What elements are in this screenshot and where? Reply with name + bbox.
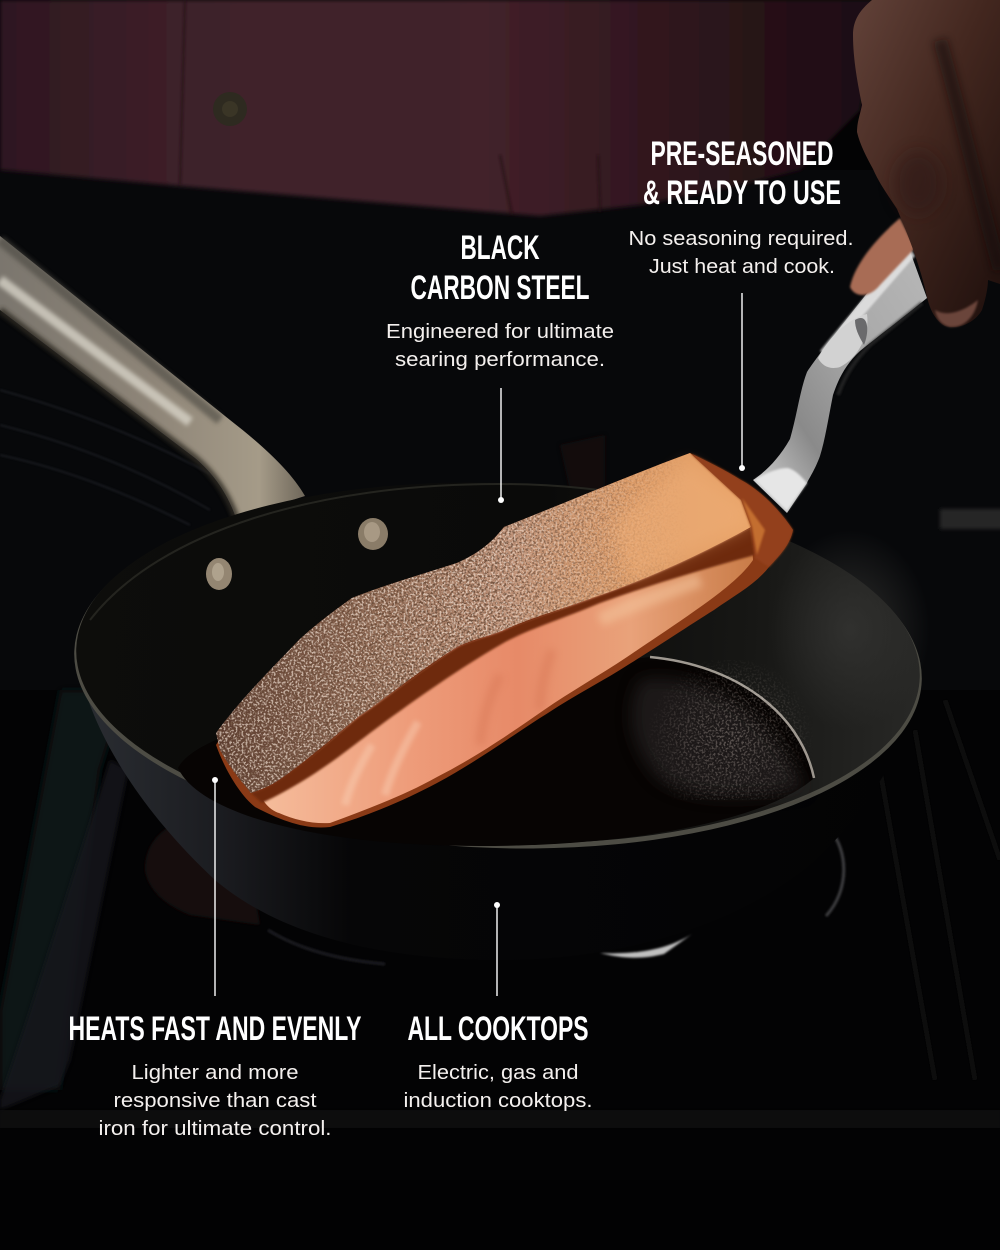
left handle	[0, 236, 305, 518]
thumb	[850, 218, 915, 295]
callout: all cooktops: induction cooktops.	[404, 1090, 592, 1112]
pan	[68, 468, 930, 960]
skin top	[216, 453, 751, 793]
cooking surface with oil	[178, 657, 814, 846]
callout: heats fast and evenly: Lighter and more	[132, 1062, 298, 1084]
rivets	[358, 518, 388, 550]
callout: heats fast and evenly	[68, 777, 362, 1140]
right crust	[690, 453, 793, 567]
callout: pre-seasoned: No seasoning required.	[628, 228, 854, 250]
flesh fibres	[345, 580, 700, 805]
callout: all cooktops: ALL COOKTOPS	[408, 1010, 588, 1048]
callout: black carbon steel: searing performance.	[395, 349, 605, 371]
callout: pre-seasoned: & READY TO USE	[643, 174, 841, 212]
callout: heats fast and evenly: responsive than cast	[114, 1090, 317, 1112]
callout: black carbon steel: Engineered for ultimate	[386, 321, 614, 343]
crust outer	[216, 453, 793, 828]
hob	[0, 690, 1000, 1250]
callout: black carbon steel: BLACK	[460, 229, 540, 267]
apron	[0, 170, 1000, 690]
spatula	[753, 243, 927, 513]
callout: pre-seasoned: Just heat and cook.	[649, 256, 835, 278]
callout: black carbon steel: CARBON STEEL	[410, 269, 590, 307]
callout: heats fast and evenly: HEATS FAST AND EVENLY	[68, 1010, 362, 1048]
pan rim and interior	[68, 469, 928, 863]
callout: pre-seasoned	[628, 135, 854, 471]
callout: pre-seasoned: PRE-SEASONED	[650, 135, 834, 173]
salmon	[216, 453, 793, 828]
pan outer body	[85, 690, 915, 960]
hand	[850, 0, 1000, 327]
callout: all cooktops	[404, 902, 592, 1112]
callout: all cooktops: Electric, gas and	[418, 1062, 578, 1084]
flesh	[263, 528, 753, 823]
lit skin end	[610, 462, 750, 580]
callout: heats fast and evenly: iron for ultimate control.	[98, 1118, 332, 1140]
callout: black carbon steel	[386, 229, 614, 503]
dark seam	[251, 527, 755, 803]
shirt	[0, 0, 880, 216]
